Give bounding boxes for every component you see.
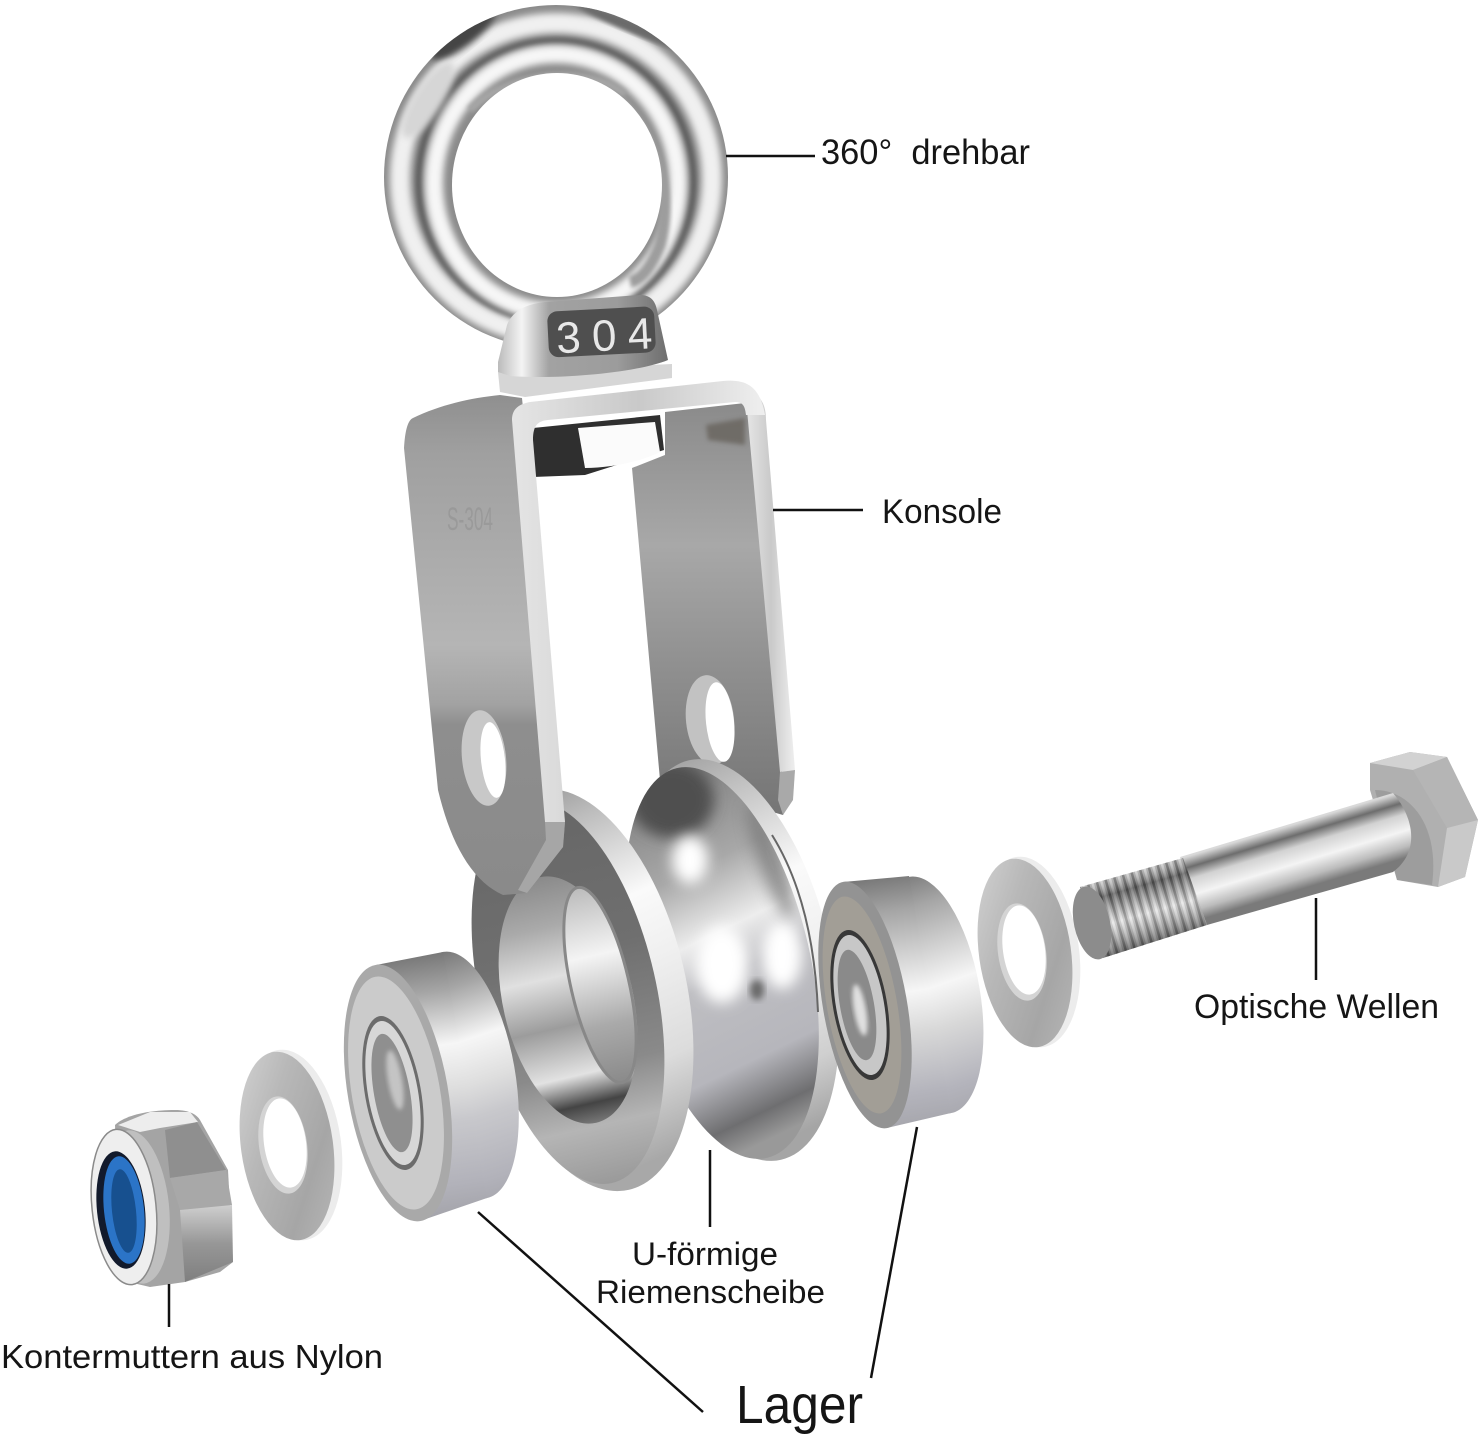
- leader line: 360: [726, 155, 815, 157]
- bolt thread: [1067, 858, 1207, 963]
- bracket: bent front edge and top band: [512, 381, 765, 822]
- swivel collar stamped 304: [498, 295, 672, 397]
- pulley: grooved wheel: [472, 759, 838, 1192]
- ring inner rough band: [620, 100, 664, 282]
- label: 360 drehbar: 360° drehbar: [821, 133, 1030, 172]
- bracket: engraved mark: S-304: [447, 501, 493, 537]
- eye bolt ring: [384, 0, 728, 349]
- leader line: pulley: [709, 1150, 711, 1227]
- nut collar: [95, 1127, 177, 1287]
- bracket: rear bent edge: [747, 395, 795, 772]
- bracket: front plate: [404, 381, 765, 895]
- ring hole: [452, 73, 662, 297]
- bracket: rear plate: [632, 395, 795, 815]
- blue nylon insert: [91, 1149, 151, 1271]
- bracket: rear mounting hole: [681, 673, 739, 767]
- bracket: front mounting hole: [457, 708, 511, 808]
- leader line: Konsole: [773, 509, 863, 511]
- nylon lock nut: [84, 1110, 233, 1288]
- right ball bearing: [802, 868, 1000, 1135]
- label: Kontermuttern aus Nylon: Kontermuttern aus Nylon: [1, 1338, 383, 1375]
- nut face ring: [84, 1126, 164, 1288]
- pulley: front flange: [437, 767, 729, 1213]
- left flat washer: [228, 1043, 354, 1247]
- threaded bolt: [1067, 752, 1478, 963]
- label: Konsole: Konsole: [882, 493, 1002, 531]
- hex bolt head under bracket: [533, 415, 664, 477]
- label: U-foermige Riemenscheibe: [596, 1236, 825, 1310]
- right flat washer: [966, 850, 1092, 1054]
- number 304: 304: [555, 309, 653, 363]
- bolt shaft: [1180, 793, 1411, 925]
- pulley: groove body: [629, 767, 819, 1159]
- bolt head: [1370, 752, 1478, 887]
- label: Lager: Lager: [736, 1375, 863, 1435]
- leader lines: bearings: [478, 1127, 917, 1412]
- left ball bearing: [326, 943, 536, 1230]
- stamped plate: [547, 306, 656, 358]
- pulley: rim: [595, 739, 875, 1181]
- label: U-foermige Riemenscheibe: Riemenscheibe: [596, 1274, 825, 1310]
- leader line: Optische Wellen: [1315, 898, 1317, 980]
- leader line: lock nut: [168, 1284, 170, 1327]
- label: Optische Wellen: Optische Wellen: [1194, 988, 1439, 1026]
- label: U-foermige Riemenscheibe: U-förmige: [632, 1236, 778, 1272]
